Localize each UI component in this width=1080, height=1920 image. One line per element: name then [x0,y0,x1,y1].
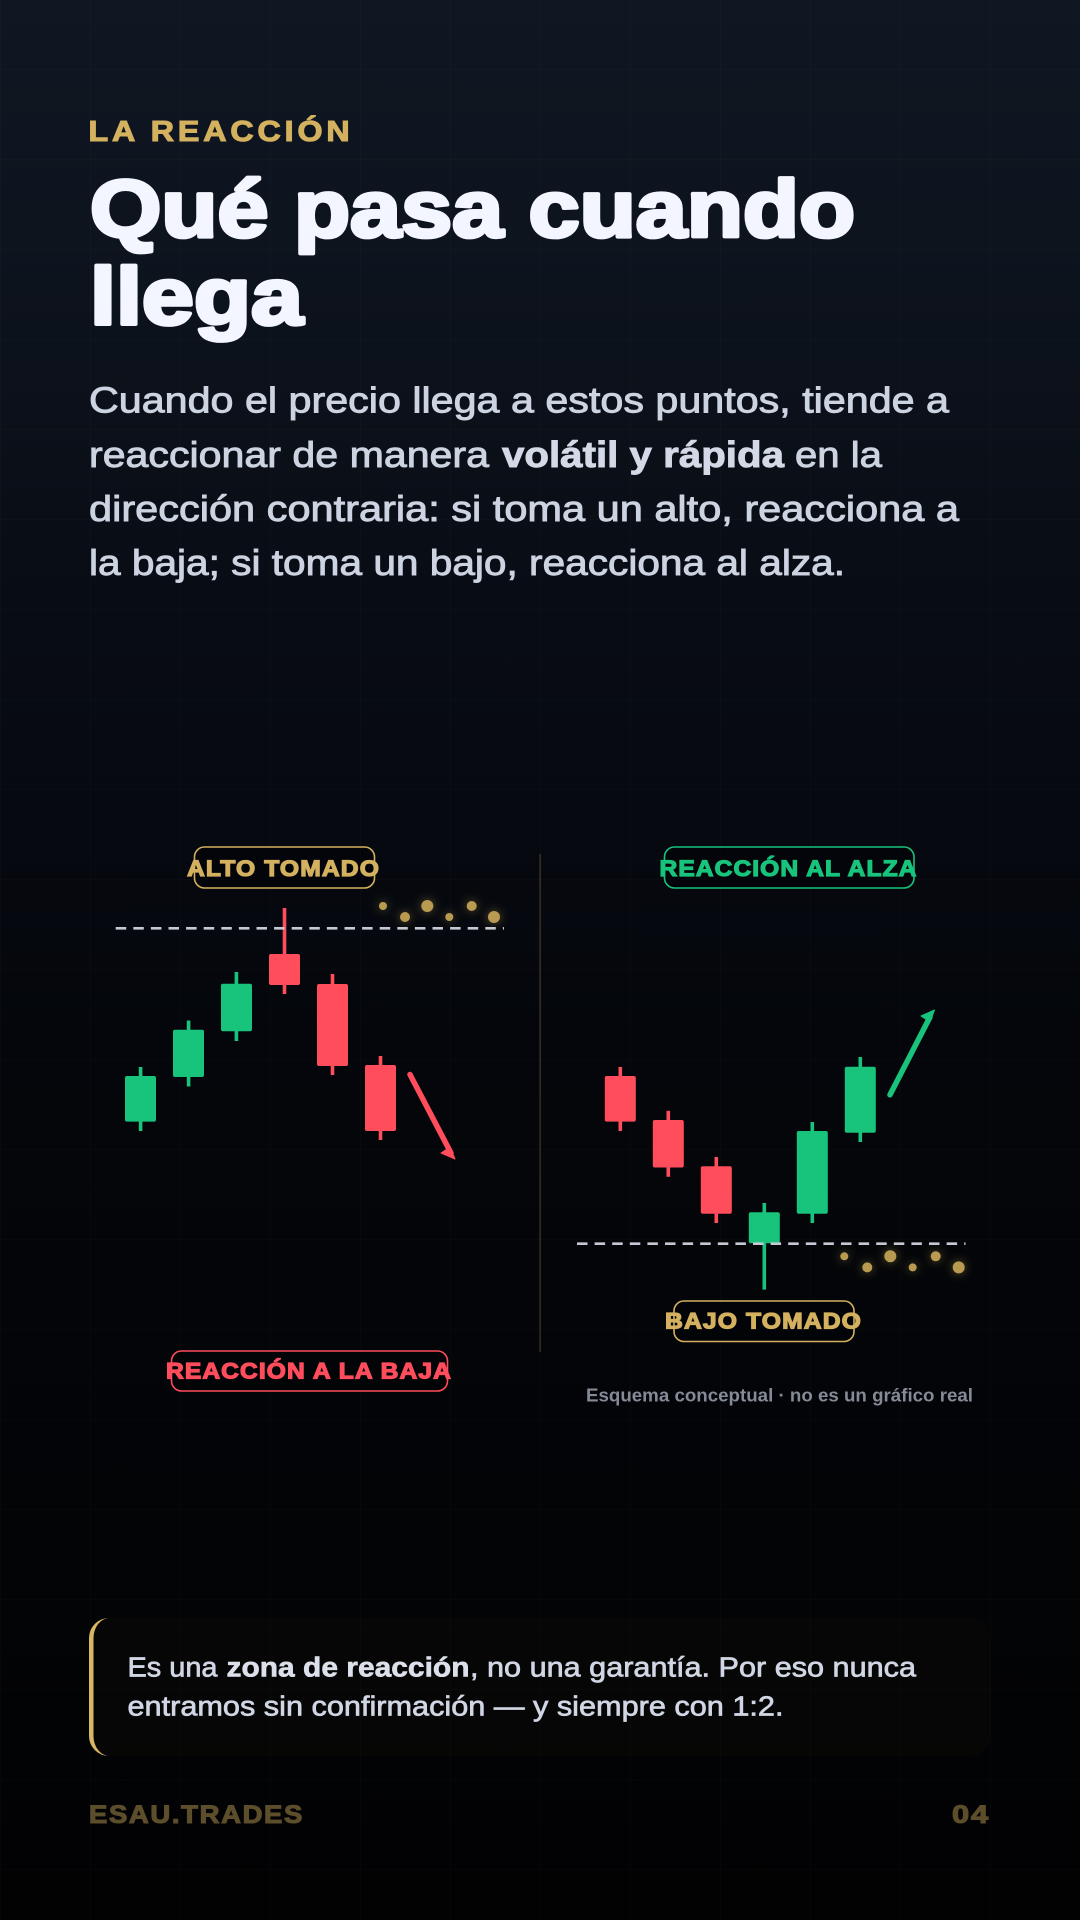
label: alto tomado [187,847,380,888]
label: reacción al alza [660,847,918,888]
callout [89,1618,991,1756]
label: reacción a la baja: REACCIÓN A LA BAJA [166,1358,452,1384]
callout background [89,1618,991,1756]
callout accent border [89,1618,109,1756]
dashed level line [577,1242,966,1245]
arrow: down [410,1074,455,1159]
title [90,164,855,342]
label: alto tomado: ALTO TOMADO [187,856,380,881]
callout text: Es una [128,1652,218,1682]
intro paragraph: volátil y rápida [502,434,785,475]
intro paragraph: en la [795,434,883,475]
intro paragraph: dirección contraria: si toma un alto, reacciona a [89,488,960,529]
liquidity dots above high [379,900,500,923]
label: bajo tomado: BAJO TOMADO [665,1308,862,1334]
intro paragraph [89,380,960,583]
label: reacción a la baja [166,1351,452,1391]
candles [605,1057,876,1290]
eyebrow: La reacción: LA REACCIÓN [88,114,354,148]
caption: Esquema conceptual · no es un gráfico real [586,1386,973,1406]
arrow: up [890,1010,934,1095]
intro paragraph: Cuando el precio llega a estos puntos, tiende a [89,380,950,420]
title: Qué pasa cuando [90,164,855,254]
footer page number: 04 [952,1801,990,1829]
dashed level line [116,927,504,930]
liquidity dots below low [840,1250,965,1273]
intro paragraph: reaccionar de manera [89,434,490,475]
divider between charts [539,854,541,1352]
callout text: zona de reacción [226,1652,470,1682]
callout text: , no una garantía. Por eso nunca [470,1652,916,1682]
panel: left chart, high taken [116,847,504,1391]
label: bajo tomado [665,1301,862,1342]
footer brand: ESAU.TRADES [89,1801,304,1829]
candles [125,908,396,1140]
panel: right chart, low taken [577,847,973,1406]
title: llega [90,252,304,342]
intro paragraph: la baja; si toma un bajo, reacciona al alza. [89,542,845,583]
callout text [128,1652,916,1722]
callout text: entramos sin confirmación — y siempre con 1:2. [128,1690,784,1722]
label: reacción al alza: REACCIÓN AL ALZA [660,856,918,881]
